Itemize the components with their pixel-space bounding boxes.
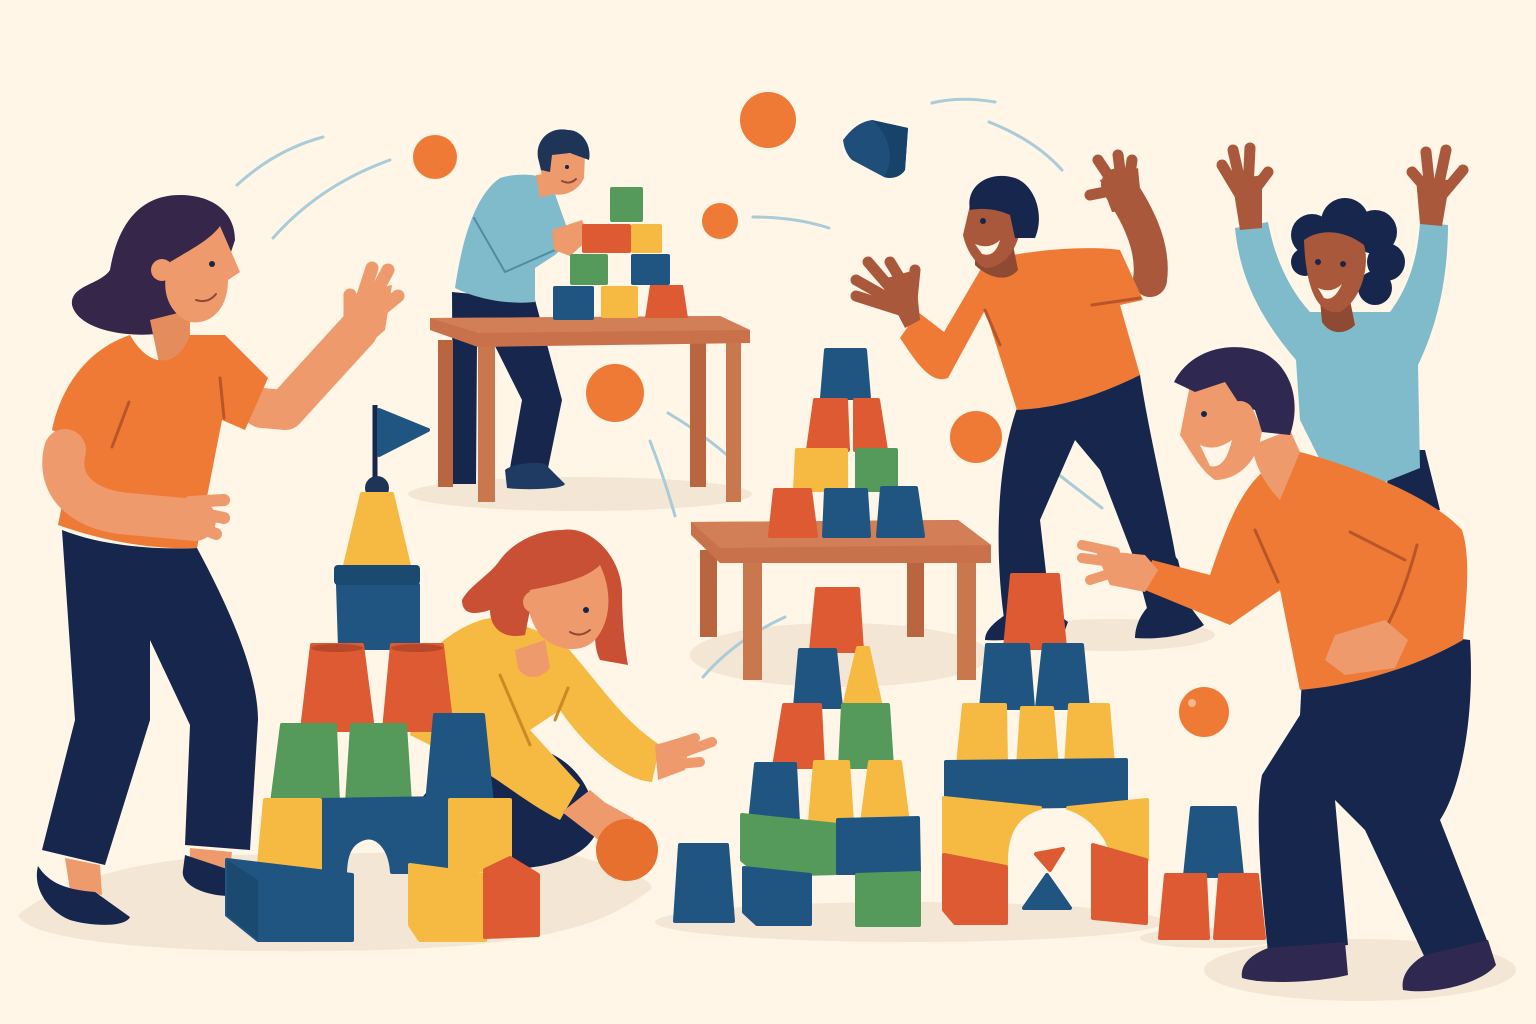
person: kneeling woman in yellow [397, 529, 712, 875]
cup tower on front table [770, 350, 923, 536]
middle tower [742, 589, 919, 925]
standalone navy cup [675, 845, 733, 921]
table: back [430, 316, 750, 502]
block stack on back table [553, 187, 688, 320]
person: man in orange, leaning forward [1082, 347, 1496, 991]
person: man in blue sweater at table [452, 129, 590, 489]
floor shadows [18, 477, 1516, 1001]
person: woman in light blue, arms raised [1222, 148, 1463, 520]
person: man in orange, hands raised [856, 155, 1204, 640]
right tower [944, 575, 1147, 923]
flying navy cup [843, 120, 908, 178]
left tower [227, 405, 538, 940]
table: front with cup tower [691, 520, 991, 680]
small cup stack [1160, 808, 1264, 938]
flying balls [413, 92, 1229, 737]
person: woman in orange, waving [37, 195, 398, 925]
orange ball near hand [596, 819, 658, 881]
motion lines [237, 99, 1102, 677]
